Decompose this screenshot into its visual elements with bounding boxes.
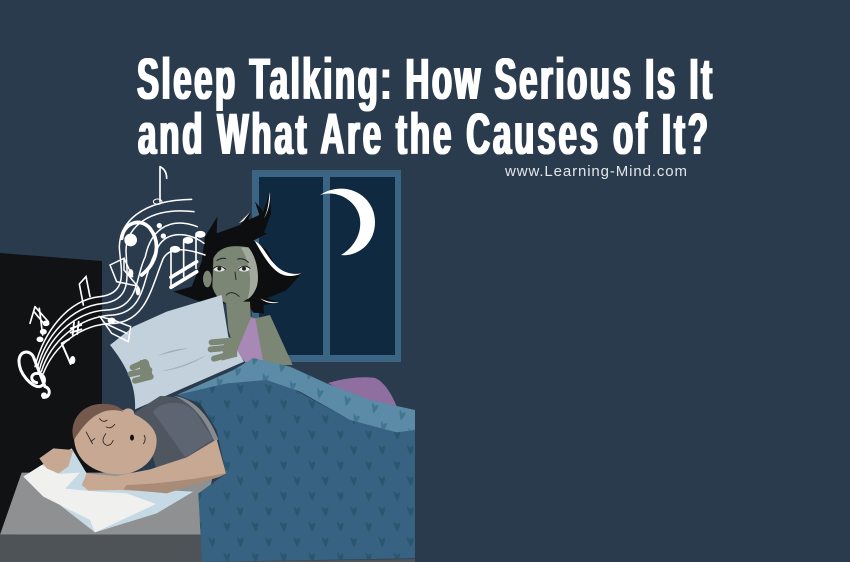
website credit: www.Learning-Mind.com [504,163,687,180]
window [252,170,401,362]
blanket fold pattern [177,358,415,432]
blanket pattern [177,373,415,562]
title [137,47,712,168]
black headboard panel [0,253,102,540]
shirt [133,396,218,470]
arm shadow [123,473,225,493]
moon [320,189,375,255]
man's ear [123,408,134,418]
face highlight [241,247,258,299]
sharp sign [71,322,81,335]
white pillow [23,465,156,532]
mouth [226,272,239,297]
music notes flowing [19,167,205,398]
top note head [153,199,162,204]
man's head [74,407,157,474]
lower note [62,339,71,364]
hair [173,192,302,313]
left beamed note [30,307,49,341]
blanket fold [177,358,415,432]
bed top [0,473,213,535]
sleeping man and bed [0,358,415,562]
title line 1: Sleep Talking: How Serious Is It [137,47,712,113]
left hand [131,360,153,382]
blanket bottom strip [202,559,415,562]
outlined notes centre [100,258,137,342]
bass clef [122,222,166,275]
beamed notes [171,232,205,287]
shirt collar band [173,396,218,441]
treble clef [19,352,49,397]
body and arm [226,302,293,365]
man's hair [73,404,123,440]
face [212,246,258,304]
pillow held [110,295,244,409]
ear [203,271,212,287]
staff lines [35,199,205,373]
man's nostril [130,435,134,441]
hair highlights [239,192,302,303]
man's hand [39,448,73,473]
man's face [86,418,145,445]
right hand [211,338,237,361]
eyes [213,258,250,272]
top note [160,167,167,202]
woman sitting up [110,192,302,409]
purple top [237,318,263,364]
purple knee [328,377,397,407]
blanket main [177,373,415,562]
shirt sleeve [153,403,213,457]
upper small note [79,277,90,305]
man's arm [82,439,226,493]
note dots [108,269,140,324]
pillow shadow [23,448,193,532]
pillow creases [157,348,207,372]
bed front [0,535,203,562]
title line 2: and What Are the Causes of It? [138,102,708,168]
